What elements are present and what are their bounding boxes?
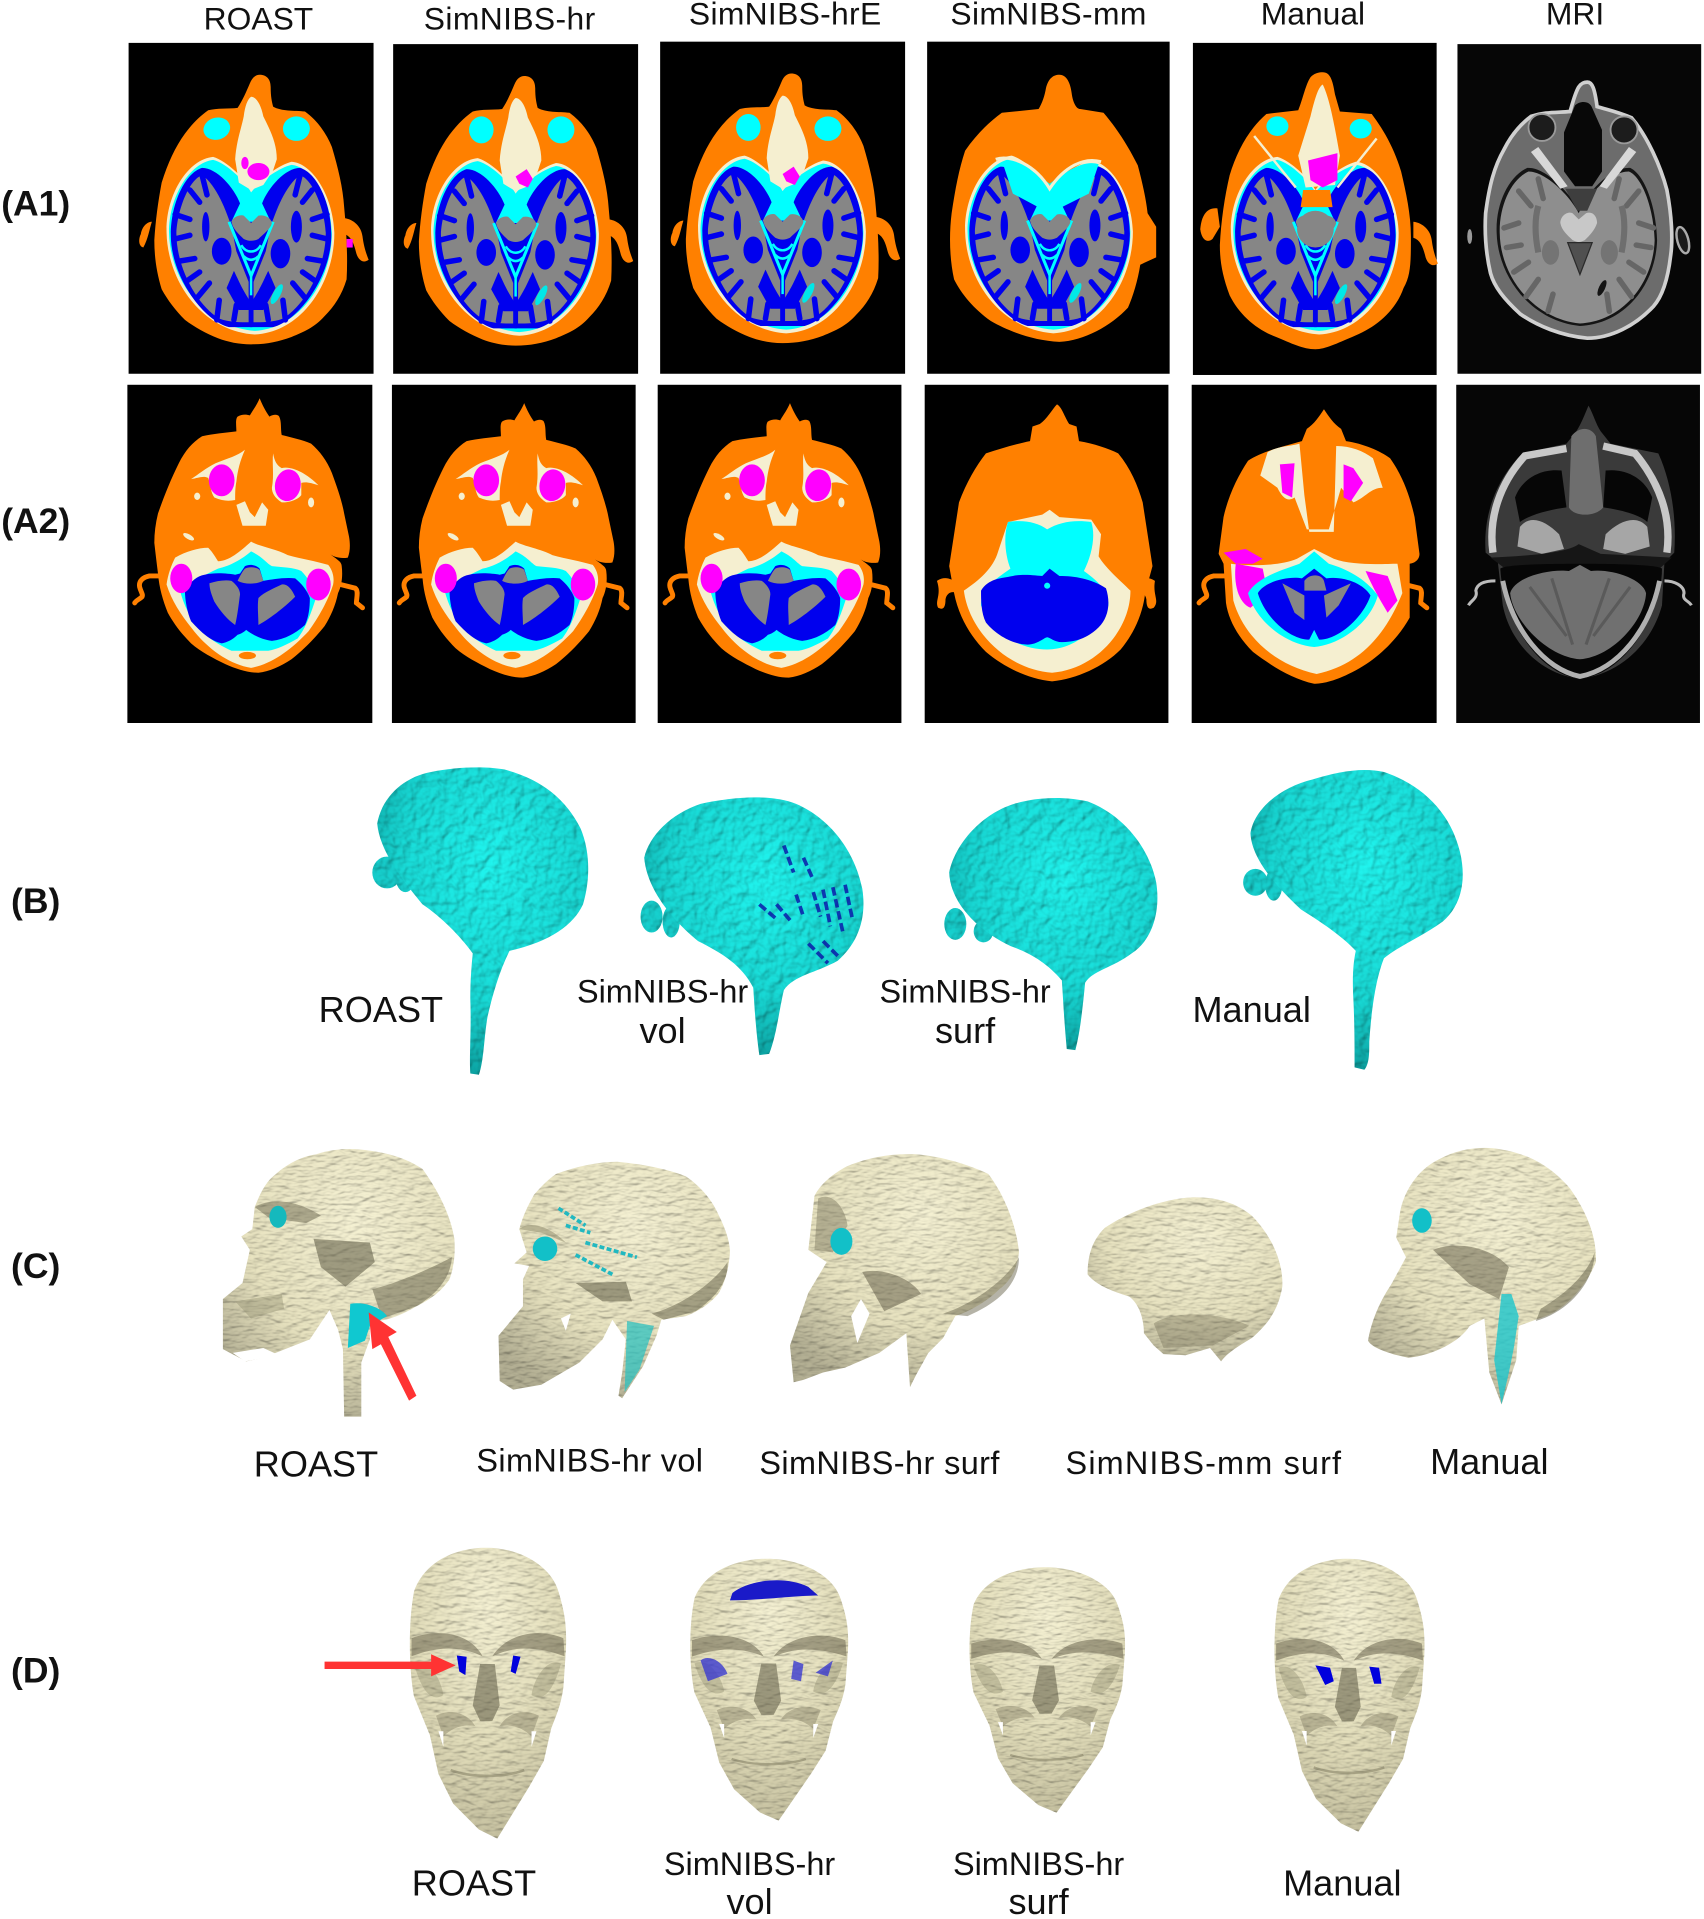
arrow: ROAST orbit: [325, 1654, 456, 1676]
B labels: Manual: [1192, 989, 1311, 1030]
C labels: SimNIBS-hr surf: [759, 1445, 1000, 1481]
C labels: SimNIBS-hr vol: [476, 1443, 703, 1479]
row label A2: (A2): [1, 501, 70, 541]
B labels: surf: [935, 1010, 996, 1051]
heading: method names above A panels: ROAST: [204, 0, 313, 36]
D labels: Manual: [1283, 1863, 1402, 1904]
C labels: ROAST: [254, 1444, 378, 1485]
panel: A1 MRI: [1457, 44, 1701, 374]
B labels: SimNIBS-hr: [879, 973, 1051, 1009]
panel: A2 SimNIBS-hr: [392, 385, 636, 723]
skull lateral: ROAST: [223, 1149, 455, 1417]
skull lateral: SimNIBS-mm surf: [1088, 1197, 1282, 1361]
heading: method names above A panels: SimNIBS-hr: [424, 0, 596, 36]
D labels: ROAST: [412, 1863, 536, 1904]
row label B: (B): [11, 881, 60, 921]
brain surface: ROAST: [372, 767, 588, 1075]
D labels: SimNIBS-hr: [953, 1846, 1124, 1882]
panel: A1 ROAST: [129, 43, 374, 374]
panel: A2 SimNIBS-mm: [925, 385, 1168, 723]
skull frontal: Manual: [1274, 1559, 1425, 1832]
B labels: vol: [640, 1010, 686, 1051]
panel: A2 MRI: [1456, 385, 1700, 723]
heading: method names above A panels: [204, 0, 1604, 36]
D labels: [412, 1846, 1402, 1919]
panel: A1 SimNIBS-hr: [393, 44, 638, 374]
skull frontal: SimNIBS-hr surf: [970, 1567, 1125, 1813]
C labels: Manual: [1430, 1441, 1549, 1482]
D labels: SimNIBS-hr: [664, 1846, 835, 1882]
B labels: [319, 973, 1311, 1051]
skull lateral: SimNIBS-hr surf: [790, 1154, 1019, 1387]
panel: A2 Manual: [1192, 385, 1437, 723]
C labels: SimNIBS-mm surf: [1066, 1445, 1342, 1481]
panel: A1 Manual: [1193, 43, 1438, 375]
arrow: ROAST cervical region: [369, 1312, 416, 1401]
B labels: SimNIBS-hr: [577, 973, 748, 1009]
row label D: (D): [11, 1650, 60, 1690]
brain surface: Manual: [1243, 770, 1463, 1070]
panel: A1 SimNIBS-mm: [927, 42, 1170, 374]
brain surface: SimNIBS-hr surf: [944, 798, 1157, 1050]
skull frontal: SimNIBS-hr vol: [690, 1559, 848, 1821]
B labels: ROAST: [319, 989, 443, 1030]
panel: A2 SimNIBS-hrE: [658, 385, 901, 723]
skull lateral: SimNIBS-hr vol: [498, 1162, 730, 1398]
panel: A2 ROAST: [127, 385, 372, 723]
row label A1: (A1): [1, 184, 70, 224]
panel: A1 SimNIBS-hrE: [660, 42, 905, 374]
brain surface: SimNIBS-hr vol: [641, 797, 863, 1055]
skull frontal: ROAST: [410, 1548, 566, 1839]
row label C: (C): [11, 1246, 60, 1286]
C labels: [254, 1441, 1549, 1485]
skull lateral: Manual: [1368, 1148, 1596, 1404]
